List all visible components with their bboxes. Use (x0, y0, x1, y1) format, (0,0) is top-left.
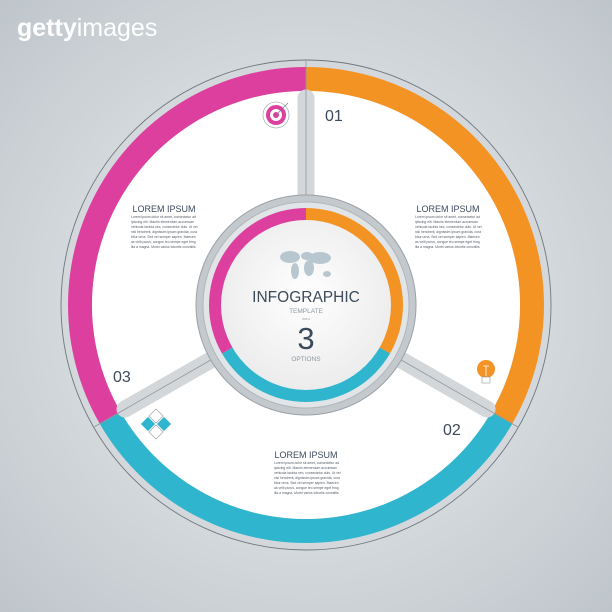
panel 03: bitur urna. Sed vel semper sapien. Maecen (131, 235, 196, 239)
panel 02: vehicula lacinia nec, consectetur duis. Ut vel (274, 471, 341, 475)
logo: gettyimages: gettyimages (17, 14, 157, 42)
panel 03 (113, 204, 198, 386)
panel 01: Lorem ipsum dolor sit amet, consectetur ad (415, 215, 480, 219)
panel 03: vehicula lacinia nec, consectetur duis. Ut vel (131, 225, 198, 229)
center hub (196, 195, 416, 415)
panel 03: as velit purus, congue leo sempe eget fring (131, 240, 196, 244)
panel 02: 02 (443, 422, 461, 439)
panel 03: Lorem ipsum dolor sit amet, consectetur ad (131, 215, 196, 219)
panel 02 (274, 422, 461, 495)
panel 02: Lorem ipsum dolor sit amet, consectetur ad (274, 461, 339, 465)
panel 01: vehicula lacinia nec, consectetur duis. Ut vel (415, 225, 482, 229)
panel 01: nisi hendrerit, dignissim ipsum gravida, cura (415, 230, 481, 234)
panel 02: ipiscing elit. Mauris elementum accumsan (274, 466, 337, 470)
panel 02: nisi hendrerit, dignissim ipsum gravida, cura (274, 476, 340, 480)
panel 03: LOREM IPSUM (132, 204, 196, 214)
icon: light bulb (477, 360, 495, 383)
panel 03: ipiscing elit. Mauris elementum accumsan (131, 220, 194, 224)
center title: OPTIONS (291, 356, 321, 363)
panel 01: illa a magna. Morbi varius lobortis convallis. (415, 245, 480, 249)
panel 03: nisi hendrerit, dignissim ipsum gravida, cura (131, 230, 197, 234)
center title (252, 289, 360, 363)
panel 01: LOREM IPSUM (416, 204, 480, 214)
center title: WITH (302, 317, 310, 321)
panel 02: as velit purus, congue leo sempe eget fring (274, 486, 339, 490)
center title: TEMPLATE (289, 308, 324, 315)
panel 03: 03 (113, 369, 131, 386)
panel gaps / connectors (94, 60, 518, 427)
panel 02: bitur urna. Sed vel semper sapien. Maecen (274, 481, 339, 485)
icon: world map (280, 251, 331, 279)
white panels (92, 91, 520, 519)
center title: INFOGRAPHIC (252, 289, 360, 306)
panel 02: LOREM IPSUM (274, 450, 338, 460)
panel 03: illa a magna. Morbi varius lobortis convallis. (131, 245, 196, 249)
icon: target (263, 102, 289, 128)
panel 01 (325, 108, 482, 249)
outer thin circle (61, 60, 551, 550)
panel 01: as velit purus, congue leo sempe eget fring (415, 240, 480, 244)
panel 01: 01 (325, 108, 343, 125)
panel 01: bitur urna. Sed vel semper sapien. Maecen (415, 235, 480, 239)
center title: 3 (297, 321, 315, 356)
icon: puzzle (141, 409, 171, 439)
outer colored ring (68, 67, 544, 543)
panel 01: ipiscing elit. Mauris elementum accumsan (415, 220, 478, 224)
panel 02: illa a magna. Morbi varius lobortis convallis. (274, 491, 339, 495)
